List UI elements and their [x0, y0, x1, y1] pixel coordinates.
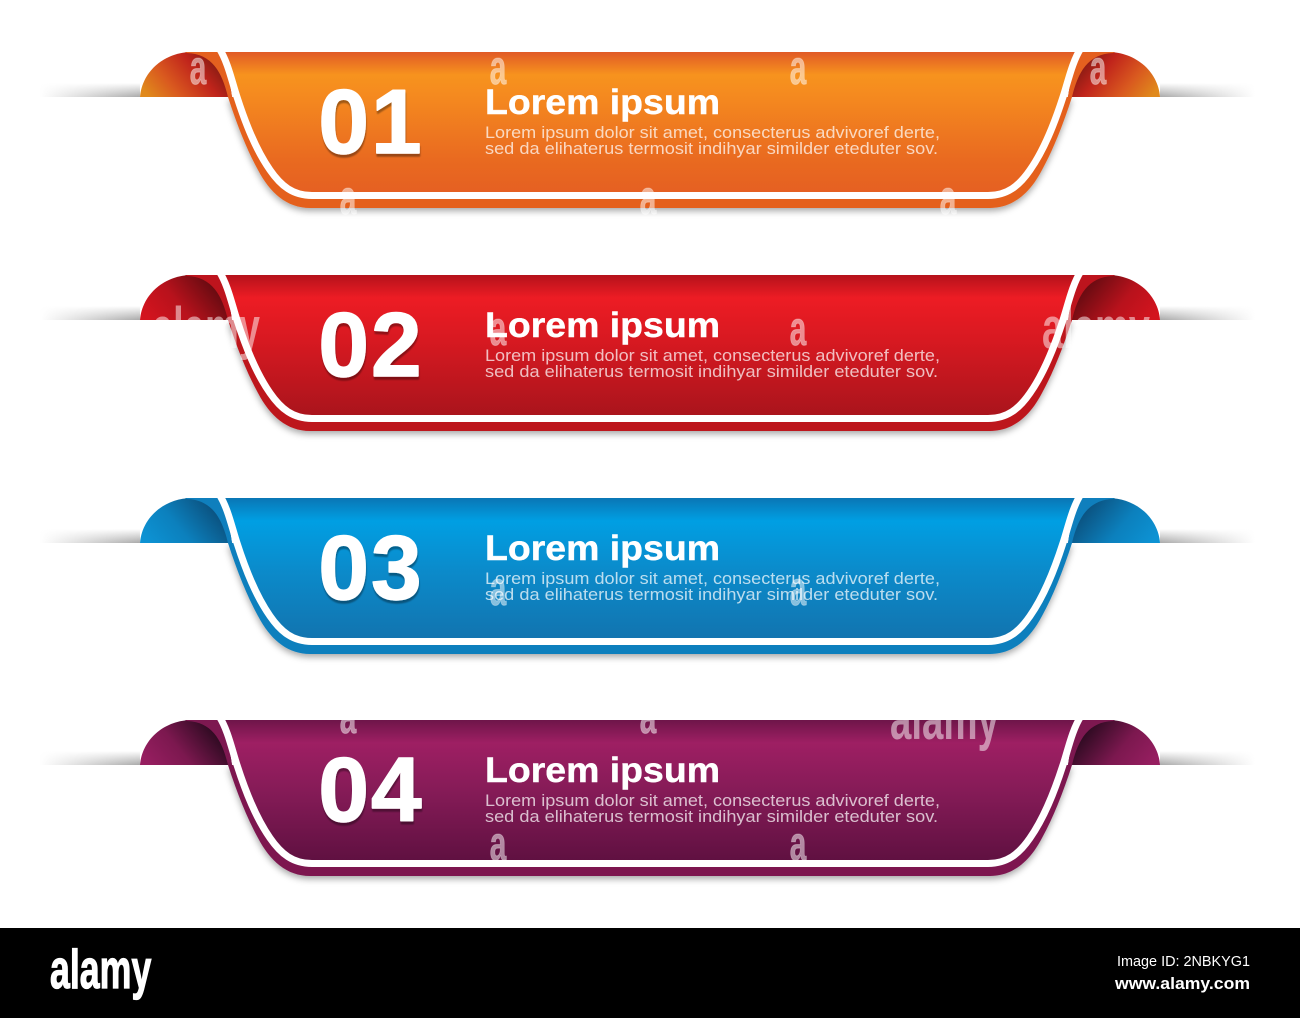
body text: sed da elihaterus termosit indihyar similder eteduter sov.: [485, 585, 938, 604]
body text: [485, 123, 940, 158]
watermark letters: a: [940, 172, 957, 225]
body text: Lorem ipsum dolor sit amet, consecterus advivoref derte,: [485, 569, 940, 588]
right edge shadow: [1160, 83, 1255, 97]
watermark marks: a: [340, 691, 357, 744]
right fold crescent: [1068, 275, 1115, 320]
left fold crescent: [185, 498, 232, 543]
body text: Lorem ipsum dolor sit amet, consecterus advivoref derte,: [485, 123, 940, 142]
left fold crescent: [185, 52, 232, 97]
ribbon lower band: [228, 765, 1072, 876]
watermark letters: [490, 563, 807, 616]
ribbon lower band: [228, 320, 1072, 431]
panel: ribbon 03: [40, 486, 1255, 654]
body text: sed da elihaterus termosit indihyar similder eteduter sov.: [485, 807, 938, 826]
right folded tab: [1068, 498, 1160, 543]
left folded tab: [140, 720, 232, 765]
top edge cover: [200, 40, 1100, 52]
panel: ribbon 02: [40, 263, 1255, 431]
image id: Image ID: 2NBKYG1: [1117, 953, 1250, 970]
number 04: 04: [318, 740, 424, 841]
watermark marks: a: [640, 691, 657, 744]
left folded tab: [140, 498, 232, 543]
left folded tab: [140, 275, 232, 320]
right edge shadow: [1160, 306, 1255, 320]
body text: [485, 346, 940, 381]
ribbon main face: [219, 52, 1081, 196]
white outline stroke: [219, 48, 1081, 196]
white outline stroke: [219, 494, 1081, 642]
footer logo: alamy: [50, 938, 152, 1000]
ribbon lower band: [228, 97, 1072, 208]
right edge shadow: [1160, 751, 1255, 765]
watermark marks: a: [790, 818, 807, 871]
ribbon main face: [219, 275, 1081, 418]
heading: Lorem ipsum: [485, 306, 720, 345]
body text: [485, 569, 940, 604]
left fold crescent: [185, 275, 232, 320]
number 01: 01: [318, 72, 424, 173]
watermark marks: a: [490, 818, 507, 871]
watermark marks: [340, 687, 999, 871]
heading: Lorem ipsum: [485, 83, 720, 122]
watermark letters: a: [1090, 42, 1107, 95]
ribbon main face: [219, 498, 1081, 642]
right folded tab: [1068, 275, 1160, 320]
right edge shadow: [1160, 529, 1255, 543]
watermark marks: alamy: [890, 687, 999, 752]
watermark letters: a: [490, 42, 507, 95]
footer bar: [0, 928, 1300, 1018]
left edge shadow: [40, 306, 140, 320]
watermark letters: a: [340, 172, 357, 225]
watermark letters: a: [190, 42, 207, 95]
heading: Lorem ipsum: [485, 529, 720, 568]
watermark letters: a: [640, 172, 657, 225]
panel: ribbon 01: [40, 40, 1255, 225]
right fold crescent: [1068, 720, 1115, 765]
right folded tab: [1068, 52, 1160, 97]
heading: Lorem ipsum: [485, 751, 720, 790]
ribbon main face: [219, 720, 1081, 864]
white outline stroke: [219, 716, 1081, 864]
panel: ribbon 04: [40, 687, 1255, 876]
body text: sed da elihaterus termosit indihyar similder eteduter sov.: [485, 362, 938, 381]
left edge shadow: [40, 751, 140, 765]
left edge shadow: [40, 529, 140, 543]
ribbon lower band: [228, 543, 1072, 654]
watermark letters: a: [790, 42, 807, 95]
body text: Lorem ipsum dolor sit amet, consecterus advivoref derte,: [485, 346, 940, 365]
body text: Lorem ipsum dolor sit amet, consecterus advivoref derte,: [485, 791, 940, 810]
right folded tab: [1068, 720, 1160, 765]
body text: sed da elihaterus termosit indihyar similder eteduter sov.: [485, 139, 938, 158]
watermark marks: a: [790, 303, 807, 356]
watermark marks: alamy: [1042, 296, 1150, 361]
top edge cover: [200, 263, 1100, 275]
white outline stroke: [219, 271, 1081, 418]
watermark letters: [190, 42, 1107, 225]
left fold crescent: [185, 720, 232, 765]
number 03: 03: [318, 518, 424, 619]
left edge shadow: [40, 83, 140, 97]
site url: www.alamy.com: [1114, 974, 1250, 993]
top edge cover: [200, 486, 1100, 498]
top edge cover: [200, 708, 1100, 720]
right fold crescent: [1068, 52, 1115, 97]
right fold crescent: [1068, 498, 1115, 543]
left folded tab: [140, 52, 232, 97]
body text: [485, 791, 940, 826]
watermark marks: a: [490, 303, 507, 356]
watermark marks: [152, 296, 1150, 361]
watermark marks: alamy: [152, 296, 260, 361]
number 02: 02: [318, 295, 424, 396]
watermark letters: a: [490, 563, 507, 616]
watermark letters: a: [790, 563, 807, 616]
